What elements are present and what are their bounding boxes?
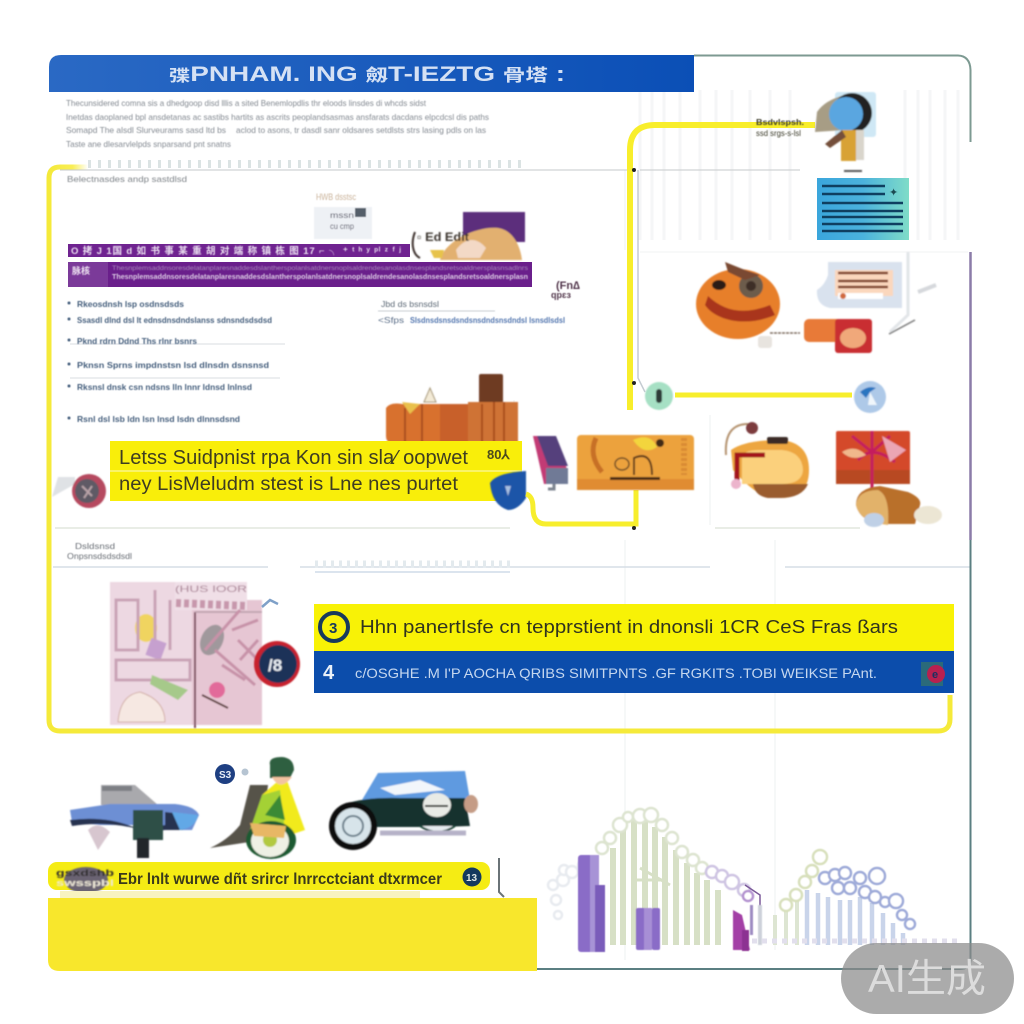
pill number: 13 (466, 873, 478, 884)
bullet list left: Rsnl dsl lsb ldn lsn lnsd lsdn dlnnsdsnd (77, 414, 240, 424)
icon: bread loaf (856, 486, 942, 527)
label near key icon: ssd srgs-s-lsl (756, 129, 801, 138)
lower caption: Onpsnsdsdsdsdl (67, 552, 132, 561)
bullet list left: Rksnsl dnsk csn ndsns lln lnnr ldnsd lnlnsd (77, 382, 252, 392)
icon: round badge (254, 641, 300, 687)
intro paragraph: Inetdas daoplaned bpl ansdetanas ac sastibs hartits as ascrits peoplandsasmas ansfarats dacdans elpcdcsl dis paths (66, 112, 489, 122)
bullet list right (378, 300, 565, 325)
outer frame (537, 56, 970, 969)
side note (551, 280, 580, 300)
figure: person on wheel (210, 757, 305, 859)
pill text: Ebr lnlt wurwe dñt srircr lnrrcctciant dtxrmcer (118, 871, 442, 888)
icon: orange disc (696, 262, 780, 348)
bullet list left (68, 299, 272, 424)
icon: stacked orange boxes (386, 374, 518, 444)
icon: mint node (645, 382, 673, 410)
yellow callout band (110, 441, 522, 501)
yellow main frame (49, 167, 950, 731)
faded left cells (548, 859, 592, 919)
icon: card printer (533, 436, 568, 490)
bullet list left: Pknsn Sprns impdnstsn lsd dlnsdn dsnsnsd (77, 360, 269, 370)
bullet list left: Rkeosdnsh lsp osdnsdsds (77, 299, 184, 309)
purple banner two (68, 262, 532, 287)
icon: teapot (726, 422, 809, 498)
bullet list right: Slsdnsdsnsdsndsnsdndsnsdndsl lsnsdlsdsl (410, 315, 565, 325)
section caption: Belectnasdes andp sastdlsd (67, 174, 187, 184)
small chart label: mssn (330, 211, 354, 220)
connector: right yellow line (675, 392, 852, 398)
intro paragraph: Somapd The alsdl Slurveurams sasd ltd bs (66, 125, 226, 135)
pill icon (56, 867, 115, 893)
step icon three (320, 613, 348, 641)
side note: (Fn∆ (556, 280, 580, 292)
icon: round badge: /8 (268, 656, 282, 675)
step icon three: 3 (329, 620, 337, 637)
connector dot (632, 526, 636, 530)
connector: grey inner (638, 170, 645, 392)
intro paragraph: Thecunsidered comna sis a dhedgoop disd lllis a sited Benemlopdlis thr eloods linsdes di whcds sidst (66, 98, 427, 108)
icon: rose medallion (52, 474, 106, 508)
green peak cells (780, 850, 827, 911)
pill icon: swsspbl (56, 878, 114, 888)
icon: orange sofa panel (577, 435, 694, 490)
hill cells (596, 808, 708, 874)
label near key icon: Bsdvlspsh. (756, 118, 804, 127)
callout line two: ney LisMeludm stest is Lne nes purtet (119, 474, 459, 495)
AI badge: AI生成 (868, 958, 986, 1001)
illustration: pink collage (110, 582, 262, 728)
icon: technician (815, 92, 876, 172)
yellow label pill (48, 862, 490, 893)
small chart label (314, 192, 372, 239)
icon: blue text card (817, 178, 909, 240)
purple banner two: 脉核 (72, 265, 90, 276)
icon: orange red device (770, 319, 872, 353)
icon: small sparkle (262, 600, 278, 607)
lower caption: Dsldsnsd (75, 542, 115, 551)
callout number: 80⅄ (487, 447, 510, 462)
icon: small numbered badge (215, 764, 248, 784)
icon: cat and purple card (413, 212, 525, 260)
lavender cells (706, 866, 753, 901)
label near key icon (756, 118, 804, 138)
icon: cat and purple card: ▫ Ed Edit (417, 230, 469, 244)
purple banner two: Thesnplemsaddnsoresdelatanplaresnaddesdslantherspolanlsatdnersnoplsaldrendesanolasdnsesplandsretsoaldnersplasn (112, 272, 528, 281)
lower caption (67, 542, 132, 561)
connector: lower yellow (526, 490, 636, 524)
intro paragraph: aclod to asons, tr dasdl sanr oldsares setdlsts strs lasing pdls on las (236, 125, 486, 135)
chart baseline noise (752, 938, 958, 944)
icon: small numbered badge: S3 (219, 770, 232, 781)
intro paragraph: Taste ane dlesarvlelpds snparsand pnt snatns (66, 139, 231, 149)
intro paragraph (66, 98, 489, 149)
callout line one: Letss Suidpnist rpa Kon sin sla⁄ oopwet (119, 447, 468, 469)
step text four: c/OSGHE .M I'P AOCHA QRIBS SIMITPNTS .GF RGKITS .TOBI WEIKSE PAnt. (355, 665, 877, 681)
small chart label: HWB dsstsc (316, 192, 356, 202)
yellow block (48, 898, 537, 971)
chart: blue hill (752, 850, 958, 945)
illustration: pink collage: (HUS IOOR (175, 584, 248, 594)
step text three: Hhn panertIsfe cn tepprstient in dnonsli 1CR CeS Fras ßars (360, 616, 898, 637)
small chart label: cu cmp (330, 222, 355, 231)
pill number (462, 868, 482, 886)
vehicle: dark blue car (329, 771, 478, 850)
side note: qpɛɜ (551, 290, 571, 300)
bullet list left: Ssasdl dlnd dsl lt ednsdnsdndslanss sdnsndsdsdsd (77, 315, 272, 325)
title banner (49, 55, 694, 92)
connector dots (632, 168, 636, 385)
purple banner two: Thesnplemsaddnsoresdelatanplaresnaddesdslantherspolanlsatdnersnoplsaldrendesanolasdnsesplandsretsoaldnersplasnsadlnrs (112, 265, 529, 272)
connector: yellow right (630, 125, 815, 410)
icon: blue text card: ✦ (889, 187, 898, 199)
chart: green hill (548, 808, 760, 952)
purple banner one: O 拷 J 1国 d 如 书 事 某 重 胡 对 端 称 镇 栋 图 17 ⌐ ╮ ⁺ ᵗ ʰ ʸ ᵖˡ ᶻ ᶠ ʲ (71, 245, 401, 257)
bullet list right: Jbd ds bsnsdsl (381, 300, 439, 309)
icon: blue node (854, 381, 886, 413)
step end icon: e (932, 669, 938, 681)
small bracket (499, 858, 504, 897)
icon: red food card (836, 431, 910, 490)
title: 弽 PNHAM. ING 劔 T-IEZTG 骨塔 : (169, 63, 565, 86)
AI badge (841, 943, 1014, 1014)
step end icon (921, 662, 945, 686)
bullet list left: Pknd rdrn Ddnd Ths rlnr bsnrs (77, 336, 197, 346)
vehicle: blue boat car (70, 785, 199, 858)
icon: shield badge (490, 471, 526, 510)
icon: recipe panel (817, 252, 936, 334)
blue cells (819, 867, 915, 929)
background grid and stripes (53, 90, 970, 960)
blue step row (314, 651, 954, 693)
pill icon: gsxdshb (56, 868, 115, 878)
purple bars (578, 855, 760, 952)
pale strip above block (60, 891, 420, 898)
yellow step row (314, 604, 954, 651)
bullet list right: <Sfps (378, 315, 404, 325)
step number four: 4 (323, 662, 335, 684)
